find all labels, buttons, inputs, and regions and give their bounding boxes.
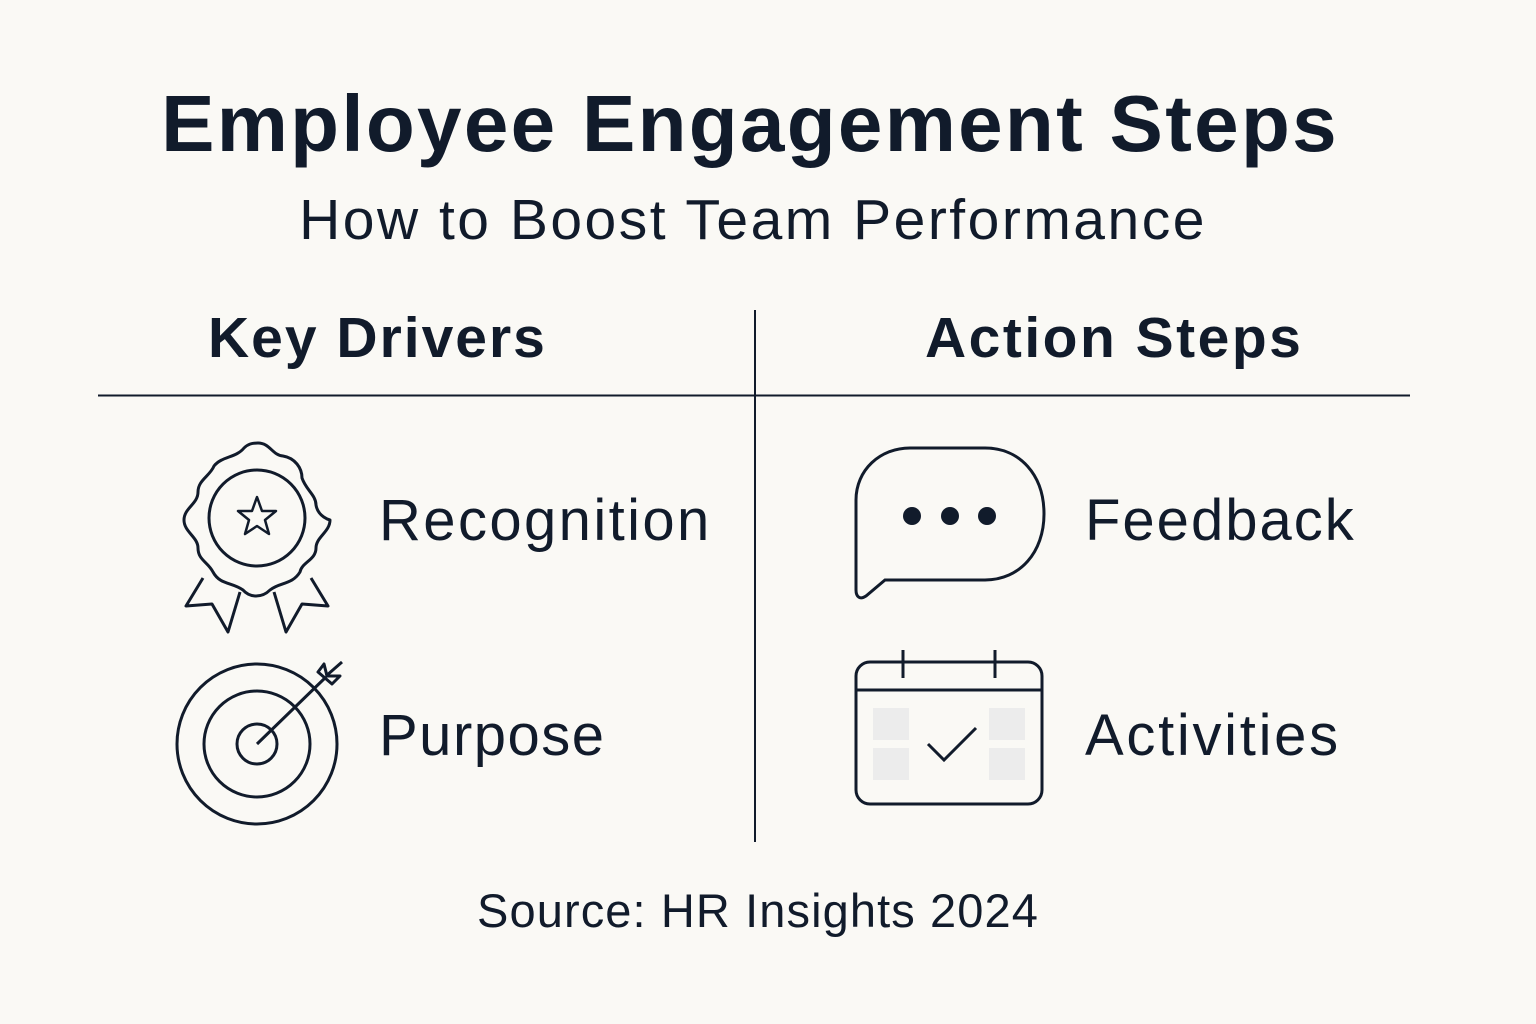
text: feedback: Feedback xyxy=(1085,488,1356,553)
text: activities: Activities xyxy=(1085,703,1341,768)
source: Source: HR Insights 2024 xyxy=(477,884,1039,937)
icon: target xyxy=(176,661,343,826)
text: recognition: Recognition xyxy=(379,488,712,553)
heading: action steps: Action Steps xyxy=(925,306,1303,370)
icon: speech bubble xyxy=(854,446,1046,600)
title: Employee Engagement Steps xyxy=(161,79,1339,168)
icon: calendar xyxy=(854,650,1044,806)
subtitle: How to Boost Team Performance xyxy=(299,188,1207,252)
heading: key drivers: Key Drivers xyxy=(208,306,547,370)
text: purpose: Purpose xyxy=(379,703,606,768)
icon: award ribbon xyxy=(182,442,332,634)
